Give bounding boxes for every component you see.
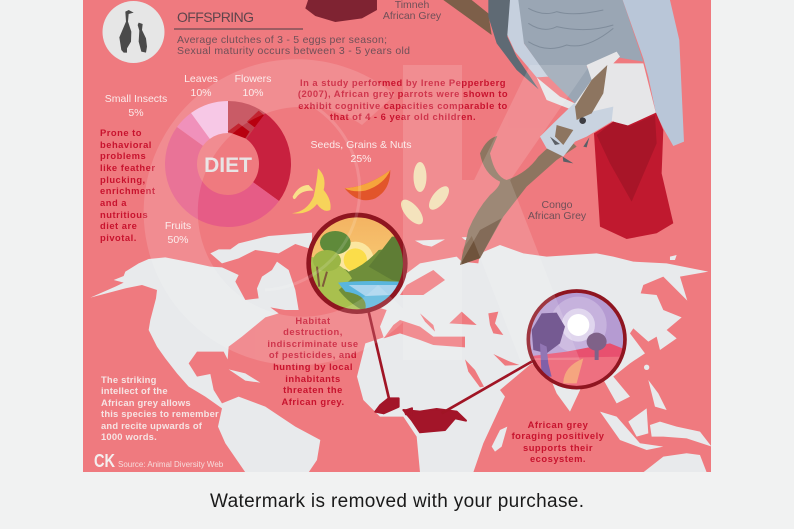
parrot foot bbox=[540, 103, 613, 157]
infographic bbox=[83, 0, 711, 511]
text: behaviour note: Prone to bbox=[100, 127, 142, 138]
icon: peanuts bbox=[401, 162, 449, 224]
scene: landscape magnifier bbox=[305, 210, 409, 317]
labels: diet percentages: 25% bbox=[350, 153, 372, 165]
icon: offspring birds bbox=[102, 1, 164, 63]
illustration: parrot bbox=[443, 0, 684, 265]
label: Timneh African Grey: African Grey bbox=[383, 10, 442, 22]
text: Pepperberg study bbox=[298, 77, 508, 122]
text: habitat threats: hunting by local bbox=[273, 361, 353, 372]
text: behaviour note: pivotal. bbox=[100, 232, 137, 243]
text: intellect note: this species to remember bbox=[101, 408, 219, 419]
heading: offspring bbox=[174, 12, 303, 30]
text: ecosystem note: supports their bbox=[523, 442, 593, 453]
logo and source: CK bbox=[94, 451, 115, 471]
labels: diet percentages: Fruits bbox=[165, 220, 191, 232]
labels: diet percentages: Seeds, Grains & Nuts bbox=[311, 139, 411, 151]
text: behaviour note: nutritious bbox=[100, 209, 148, 220]
caption: watermark notice: Watermark is removed with your purchase. bbox=[210, 491, 584, 512]
text: habitat threats: threaten the bbox=[283, 384, 343, 395]
label: diet: DIET bbox=[204, 154, 252, 177]
text: offspring details: Average clutches of 3 - 5 eggs per season; bbox=[177, 34, 387, 46]
text: ecosystem note: foraging positively bbox=[512, 430, 605, 441]
text: behaviour note: behavioral bbox=[100, 139, 152, 150]
text: habitat threats: indiscriminate use bbox=[267, 338, 359, 349]
text: behaviour note: diet are bbox=[100, 220, 137, 231]
region: West Africa range blob bbox=[375, 398, 412, 415]
text: intellect note bbox=[101, 374, 219, 442]
labels: diet percentages: 50% bbox=[167, 234, 189, 246]
branch bbox=[460, 133, 577, 265]
chart: diet donut bbox=[165, 101, 291, 227]
text: habitat threats: Habitat bbox=[295, 315, 331, 326]
labels: diet percentages: Small Insects bbox=[105, 93, 167, 105]
label: Congo African Grey: Congo bbox=[542, 199, 573, 211]
label: Congo African Grey: African Grey bbox=[528, 210, 587, 222]
text: behaviour note: and a bbox=[100, 197, 127, 208]
labels: diet percentages: 5% bbox=[128, 107, 144, 119]
text: intellect note: The striking bbox=[101, 374, 157, 385]
text: habitat threats: African grey. bbox=[281, 396, 345, 407]
logo and source: Source: Animal Diversity Web bbox=[118, 460, 224, 469]
text: habitat threats: destruction, bbox=[283, 326, 343, 337]
text: behaviour note: like feather bbox=[100, 162, 156, 173]
text: behaviour note: enrichment bbox=[100, 185, 156, 196]
region: Congo range blob bbox=[403, 409, 466, 432]
text: intellect note: intellect of the bbox=[101, 385, 168, 396]
text: Pepperberg study: In a study performed by Irene Pepperberg bbox=[300, 77, 506, 88]
text: behaviour note: plucking, bbox=[100, 174, 146, 185]
text: ecosystem note: ecosystem. bbox=[530, 453, 586, 464]
label: Timneh African Grey bbox=[383, 0, 442, 22]
icon: orange slice bbox=[345, 170, 390, 200]
text: ecosystem note: African grey bbox=[528, 419, 589, 430]
labels: diet percentages: 10% bbox=[242, 87, 264, 99]
world map bbox=[90, 233, 712, 472]
text: Pepperberg study: (2007), African grey parrots were shown to bbox=[298, 88, 508, 99]
text: offspring details bbox=[177, 36, 410, 56]
text: offspring details: Sexual maturity occurs between 3 - 5 years old bbox=[177, 45, 410, 57]
text: habitat threats bbox=[267, 315, 359, 407]
text: behaviour note: problems bbox=[100, 150, 146, 161]
parrot tail bbox=[594, 113, 673, 239]
text: intellect note: and recite upwards of bbox=[101, 420, 203, 431]
labels: diet percentages: Flowers bbox=[235, 73, 271, 85]
labels: diet percentages bbox=[105, 73, 411, 246]
arrow: ecosystem line bbox=[442, 362, 532, 413]
arrow: habitat line bbox=[369, 312, 389, 400]
text: behaviour note bbox=[100, 127, 156, 243]
text: Pepperberg study: exhibit cognitive capacities comparable to bbox=[298, 100, 508, 111]
icon: Timneh range blob bbox=[305, 0, 377, 22]
heading: offspring: OFFSPRING bbox=[177, 9, 254, 25]
icon: banana bbox=[292, 168, 331, 214]
text: ecosystem note bbox=[512, 419, 605, 464]
panel: infographic background bbox=[83, 0, 711, 472]
text: intellect note: African grey allows bbox=[101, 397, 191, 408]
text: Pepperberg study: that of 4 - 6 year old children. bbox=[330, 111, 476, 122]
text: habitat threats: of pesticides, and bbox=[269, 349, 357, 360]
labels: diet percentages: 10% bbox=[190, 87, 212, 99]
logo and source bbox=[94, 454, 223, 468]
label: Congo African Grey bbox=[528, 201, 586, 221]
text: habitat threats: inhabitants bbox=[285, 373, 341, 384]
watermark bbox=[144, 59, 590, 365]
scene: moonlit savanna magnifier bbox=[527, 290, 627, 390]
text: intellect note: 1000 words. bbox=[101, 431, 157, 442]
labels: diet percentages: Leaves bbox=[184, 73, 218, 85]
